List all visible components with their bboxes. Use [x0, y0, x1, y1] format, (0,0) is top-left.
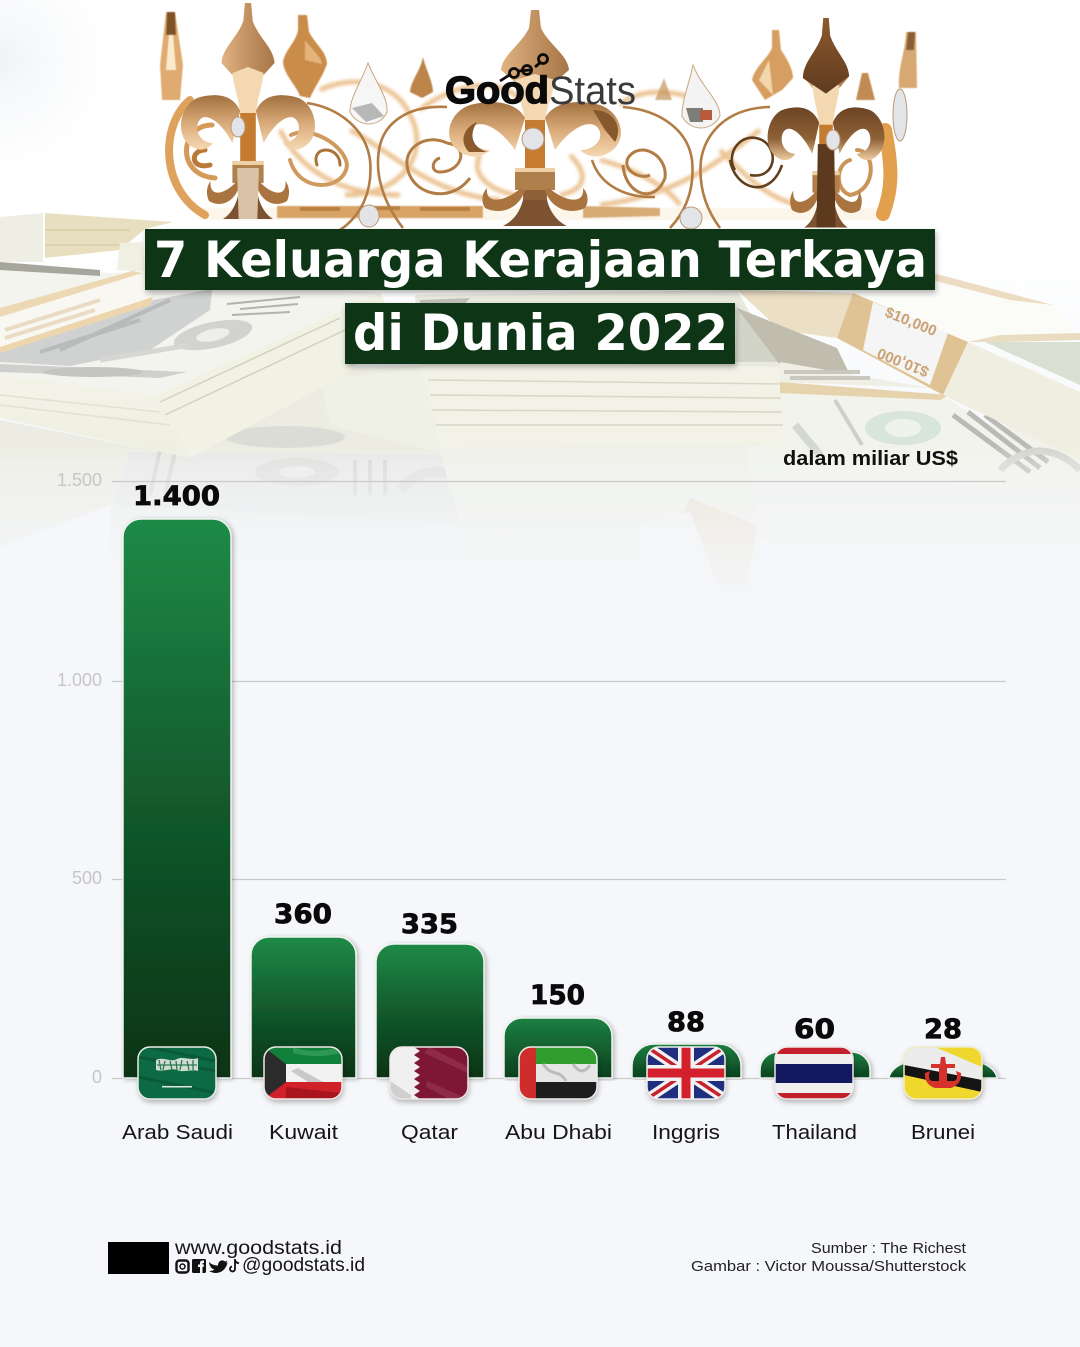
- crown rim: [200, 206, 880, 220]
- footer: source: Gambar : Victor Moussa/Shutterstock: [691, 1258, 967, 1275]
- flag: United Kingdom: [647, 1047, 725, 1099]
- title: [145, 229, 935, 364]
- bar chart: [57, 470, 1006, 1144]
- footer: website and socials: [108, 1238, 365, 1276]
- crown image: [160, 3, 917, 230]
- category labels: Arab Saudi: [122, 1121, 233, 1144]
- grid lines and axis labels: 1.000: [57, 670, 102, 690]
- bar: Thailand: [760, 1014, 870, 1078]
- crown back blurred scrolls: [280, 82, 800, 205]
- title line 2: di Dunia 2022: [353, 304, 728, 362]
- fleur: center: [449, 10, 621, 226]
- crown gems: [231, 63, 907, 229]
- bar: Thailand: 60: [794, 1014, 835, 1045]
- right lower bill: [745, 393, 1080, 610]
- logo: GoodStats: Good: [445, 70, 549, 112]
- bar: Kuwait: [251, 899, 356, 1078]
- category labels: Brunei: [911, 1121, 975, 1144]
- flag: Qatar: [390, 1047, 468, 1099]
- logo chart line: [500, 54, 548, 81]
- crown thin scrolls: [307, 103, 782, 230]
- grid lines and axis labels: 1.500: [57, 470, 102, 490]
- fleur: left: [181, 3, 315, 219]
- crown back spikes: [160, 12, 917, 100]
- bar: Qatar: [376, 909, 484, 1078]
- lower middle stack: [110, 426, 485, 600]
- back left stack: [0, 213, 173, 272]
- flag: Thailand: [775, 1047, 853, 1099]
- grid lines and axis labels: [57, 470, 1006, 1087]
- category labels: Qatar: [401, 1121, 458, 1144]
- footer: source: [691, 1240, 967, 1275]
- category labels: Kuwait: [269, 1121, 338, 1144]
- crown side orange swirls: [169, 100, 890, 215]
- bar: Qatar: 335: [401, 909, 458, 940]
- unit label: dalam miliar US$: [783, 448, 958, 470]
- bar: Inggris: 88: [667, 1007, 705, 1038]
- category labels: [122, 1121, 975, 1144]
- flag: Saudi Arabia: [138, 1047, 216, 1099]
- footer: website and socials: www.goodstats.id: [174, 1238, 342, 1259]
- category labels: Thailand: [772, 1121, 857, 1144]
- footer: source: Sumber : The Richest: [811, 1240, 967, 1257]
- bar: Kuwait: 360: [274, 899, 332, 930]
- front left bill top: [0, 263, 380, 395]
- bar: Brunei: [889, 1014, 997, 1078]
- bar: Inggris: [632, 1007, 741, 1078]
- footer: website and socials: @goodstats.id: [242, 1255, 365, 1276]
- money underlay: [130, 365, 480, 470]
- lower left stack: [0, 432, 130, 547]
- grid lines and axis labels: 500: [72, 868, 102, 888]
- bar: Arab Saudi: [123, 481, 231, 1078]
- right strap stack: [737, 273, 1080, 460]
- strap text: $10,000: [883, 304, 939, 340]
- category labels: Inggris: [652, 1121, 720, 1144]
- bar: Arab Saudi: 1.400: [133, 481, 220, 512]
- flag: Kuwait: [264, 1047, 342, 1099]
- title line 1: 7 Keluarga Kerajaan Terkaya: [154, 231, 927, 289]
- logo: GoodStats: [445, 54, 636, 113]
- fade to background: [0, 445, 1080, 610]
- category labels: Abu Dhabi: [505, 1121, 612, 1144]
- bar: Brunei: 28: [924, 1014, 962, 1045]
- right strap stack: $10,000: [875, 344, 931, 380]
- flag: UAE: [519, 1047, 597, 1099]
- black logo block: [108, 1242, 169, 1274]
- flag: Brunei: [904, 1047, 982, 1099]
- paper strap: [0, 271, 143, 317]
- grid lines and axis labels: 0: [92, 1067, 102, 1087]
- fleur: right: [768, 18, 884, 228]
- center lower stack: [320, 368, 760, 600]
- logo: GoodStats: Stats: [549, 69, 636, 113]
- front left stack: [0, 262, 400, 458]
- bar: Abu Dhabi: [504, 980, 612, 1078]
- social icons: [176, 1259, 239, 1273]
- center stack: [415, 290, 783, 448]
- bar: Abu Dhabi: 150: [530, 980, 585, 1011]
- money stacks background image: [0, 213, 1080, 610]
